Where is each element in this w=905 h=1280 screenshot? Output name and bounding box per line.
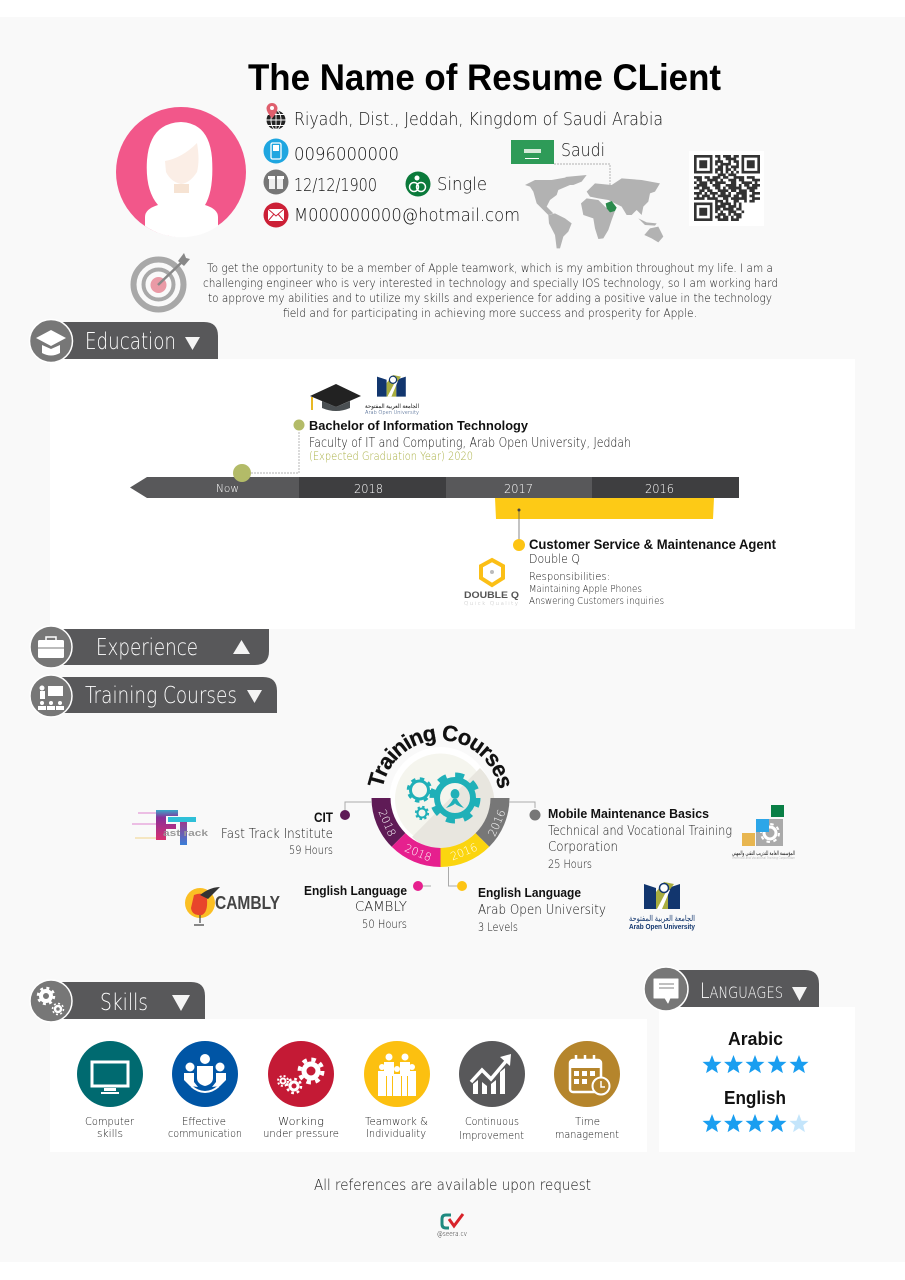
logo: TVTC: Technical and Vocational Training Corporation xyxy=(732,856,795,860)
logo: Arab Open University large: الجامعة العربية المفتوحة xyxy=(629,914,695,923)
timeline: 2016 xyxy=(645,482,674,496)
logo: Double Q xyxy=(464,560,519,607)
course: CIT: CIT xyxy=(314,809,333,825)
heading: skills: Skills xyxy=(100,990,148,1016)
ring segments: 2016 xyxy=(449,841,479,863)
heading: skills xyxy=(30,980,205,1022)
heading: education: Education xyxy=(85,329,176,355)
logo: Cambly xyxy=(185,887,280,925)
logo: seera cv xyxy=(437,1214,467,1238)
timeline: 2017 xyxy=(504,482,533,496)
world map xyxy=(525,175,663,248)
heading: training courses: Training Courses xyxy=(85,683,237,709)
skill: time management: Time xyxy=(575,1115,600,1128)
timeline: 2018 xyxy=(354,482,383,496)
objective text xyxy=(203,261,778,320)
course: English, Cambly xyxy=(304,881,423,931)
skill: computer: Computer xyxy=(85,1115,134,1128)
logo: Arab Open University large xyxy=(629,882,695,931)
job text: Customer Service & Maintenance Agent xyxy=(529,537,776,552)
panel: languages xyxy=(644,967,855,1152)
ring segments xyxy=(372,798,510,867)
logo: TVTC xyxy=(732,805,795,860)
icon: target xyxy=(134,253,190,310)
logo: Fast Track: ast rack xyxy=(163,828,209,839)
ring segments: 2018 xyxy=(403,842,433,864)
logo: Cambly: CAMBLY xyxy=(215,893,280,913)
skill: continuous improvement xyxy=(459,1041,525,1142)
job text xyxy=(513,537,776,607)
nationality: flag and map xyxy=(511,140,663,248)
chart: training courses wheel xyxy=(344,726,536,886)
heading: experience xyxy=(30,626,269,668)
course: mobile maintenance: Mobile Maintenance Basics xyxy=(548,806,709,821)
graduation cap icon xyxy=(310,384,361,411)
objective text: field and for participating in achieving more success and prosperity for Apple. xyxy=(283,306,697,320)
nationality label: Saudi xyxy=(561,140,605,161)
course: English, Arab Open University: English Language xyxy=(478,885,581,900)
skill: communication: communication xyxy=(168,1127,242,1140)
skill: continuous improvement: Improvement xyxy=(459,1129,524,1142)
language: English xyxy=(702,1088,808,1132)
heading: training courses xyxy=(30,675,277,717)
title: The Name of Resume CLient xyxy=(248,57,721,98)
degree text xyxy=(294,418,631,463)
course: mobile maintenance: 25 Hours xyxy=(548,857,592,871)
course: English, Cambly: CAMBLY xyxy=(355,900,407,915)
references note: All references are available upon request xyxy=(314,1176,591,1194)
course: mobile maintenance: Technical and Vocational Training xyxy=(548,824,732,839)
course: English, Arab Open University xyxy=(457,881,606,934)
skill: continuous improvement: Continuous xyxy=(465,1115,519,1128)
job text: Double Q xyxy=(529,552,580,566)
degree text: Faculty of IT and Computing, Arab Open University, Jeddah xyxy=(309,436,631,451)
course: mobile maintenance: Corporation xyxy=(548,840,618,855)
icon: gears xyxy=(408,775,478,821)
logo: Arab Open University xyxy=(365,375,419,416)
skill: working under pressure: under pressure xyxy=(263,1127,339,1140)
avatar xyxy=(116,107,246,237)
contact details xyxy=(264,103,663,228)
phone number: 0096000000 xyxy=(294,144,399,165)
skill: communication xyxy=(168,1041,242,1140)
icon: rings xyxy=(406,172,430,196)
skill: teamwork: Individuality xyxy=(366,1127,426,1140)
degree text: Bachelor of Information Technology xyxy=(309,418,529,433)
address: Riyadh, Dist., Jeddah, Kingdom of Saudi Arabia xyxy=(294,109,663,130)
objective text: challenging engineer who is very interested in technology and specially IOS technology, so I am working hard xyxy=(203,276,778,290)
job text: Maintaining Apple Phones xyxy=(529,584,642,595)
language: Arabic xyxy=(702,1029,808,1073)
skill: teamwork: Teamwork & xyxy=(365,1115,428,1128)
logo: Arab Open University: Arab Open University xyxy=(365,410,419,416)
skill: computer: skills xyxy=(97,1127,123,1140)
course: mobile maintenance xyxy=(530,806,732,871)
skill: time management: management xyxy=(555,1128,619,1141)
icon: mail xyxy=(264,202,288,228)
birth date: 12/12/1900 xyxy=(294,175,377,196)
skill: time management xyxy=(554,1041,620,1141)
objective text: To get the opportunity to be a member of Apple teamwork, which is my ambition throughout my life. I am a xyxy=(207,261,773,275)
job text: Responsibilities: xyxy=(529,571,610,583)
icon: location globe xyxy=(266,103,286,130)
course: English, Arab Open University: 3 Levels xyxy=(478,920,518,934)
logo: Arab Open University: الجامعة العربية المفتوحة xyxy=(365,403,419,410)
skill: computer xyxy=(77,1041,143,1140)
language: Arabic: Arabic xyxy=(728,1029,783,1049)
heading: education xyxy=(30,320,218,362)
ring segments: 2016 xyxy=(486,808,509,838)
degree text: (Expected Graduation Year) 2020 xyxy=(309,449,473,463)
icon: gift xyxy=(264,170,288,194)
icon: phone xyxy=(264,138,288,164)
email: M000000000@hotmail.com xyxy=(294,205,520,226)
job text: Answering Customers inquiries xyxy=(529,596,664,607)
heading: languages xyxy=(644,967,819,1011)
QR code xyxy=(689,151,764,226)
course: CIT: Fast Track Institute xyxy=(221,827,333,842)
timeline xyxy=(130,464,739,519)
objective text: to approve my abilities and to utilize my skills and experience for adding a positive value in the technology xyxy=(208,291,772,305)
course: CIT: 59 Hours xyxy=(289,843,333,857)
icon: Saudi flag xyxy=(511,140,554,164)
curved heading: Training Courses xyxy=(368,726,510,788)
skill: teamwork xyxy=(364,1041,430,1140)
panel: education xyxy=(30,320,855,629)
logo: Fast Track xyxy=(132,810,209,845)
ring segments: 2018 xyxy=(375,808,398,838)
logo: Double Q: Quick Quality xyxy=(464,601,518,607)
course: English, Cambly: 50 Hours xyxy=(362,917,407,931)
heading: experience: Experience xyxy=(96,635,198,661)
logo: seera cv: @seera.cv xyxy=(437,1230,467,1238)
timeline: Now xyxy=(216,482,239,495)
skill: working under pressure: Working xyxy=(278,1115,324,1128)
skill: communication: Effective xyxy=(182,1115,226,1128)
course: English, Cambly: English Language xyxy=(304,883,407,898)
language: English: English xyxy=(724,1088,786,1108)
panel: skills xyxy=(30,980,647,1152)
marital status: Single xyxy=(437,174,487,195)
course: CIT xyxy=(221,809,350,857)
logo: Double Q: DOUBLE Q xyxy=(464,590,519,601)
logo: TVTC: المؤسسة العامة للتدريب التقني والمهني xyxy=(732,850,795,857)
skill: working under pressure xyxy=(263,1041,339,1140)
heading: languages: LANGUAGES xyxy=(700,979,783,1003)
logo: Arab Open University large: Arab Open University xyxy=(629,924,695,931)
course: English, Arab Open University: Arab Open University xyxy=(478,903,606,918)
